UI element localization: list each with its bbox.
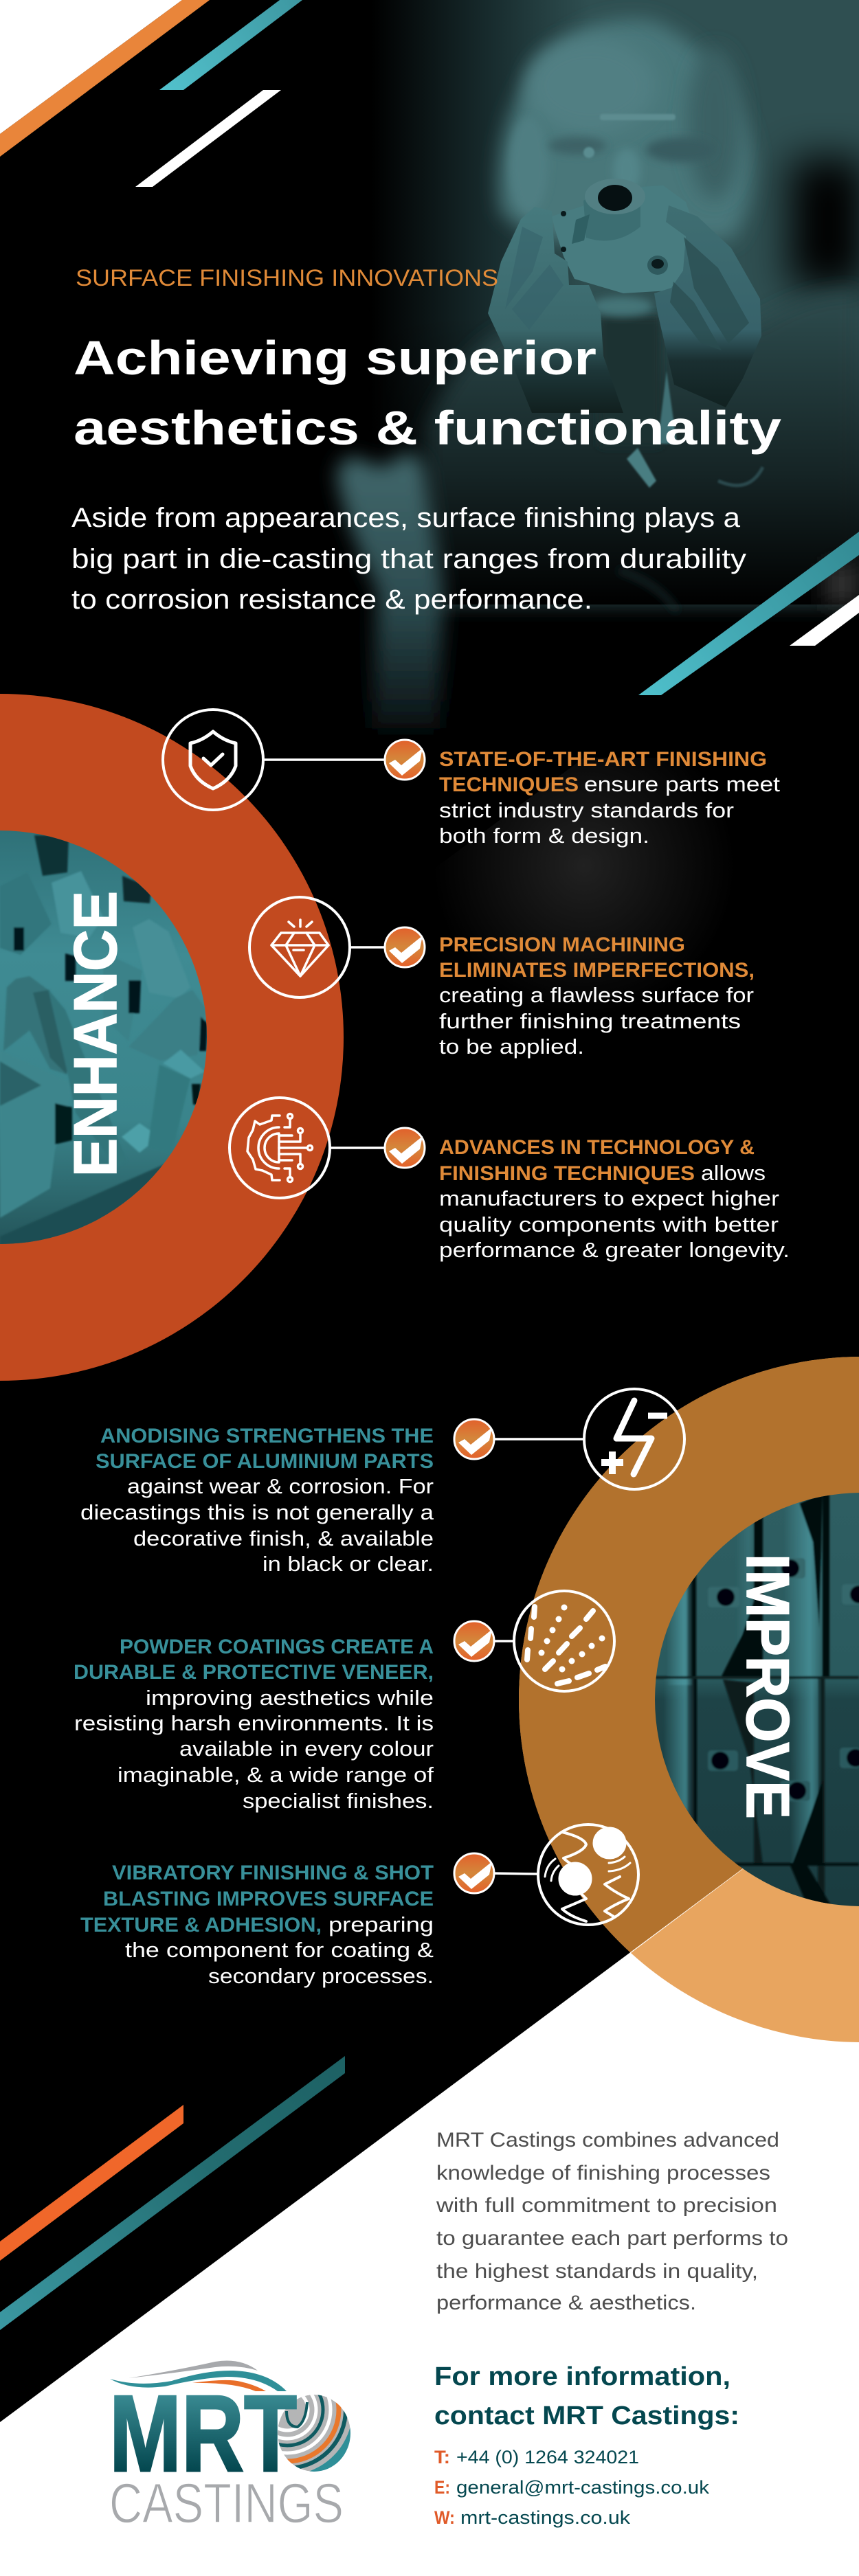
text block: anodising: decorative finish, & available <box>133 1526 434 1550</box>
text block: anodising: SURFACE OF ALUMINIUM PARTS <box>96 1450 434 1473</box>
text block: anodising: ANODISING STRENGTHENS THE <box>100 1425 434 1447</box>
body <box>426 292 859 605</box>
text block: vibratory finishing <box>80 1862 434 1988</box>
text block: vibratory finishing: secondary processes. <box>208 1964 434 1988</box>
text block: anodising: diecastings this is not generally a <box>80 1500 434 1524</box>
text block: powder coatings: resisting harsh environments. It is <box>74 1711 434 1735</box>
text block: powder coatings: POWDER COATINGS CREATE A <box>120 1636 434 1658</box>
IMPROVE label: IMPROVE <box>734 1554 802 1819</box>
text block: advances in technology: FINISHING TECHNIQUES <box>439 1162 695 1185</box>
teal stripe <box>159 0 302 90</box>
text block: powder coatings: available in every colour <box>179 1737 434 1761</box>
text block: anodising: in black or clear. <box>263 1552 434 1576</box>
ENHANCE label: ENHANCE <box>61 891 129 1177</box>
text block: precision machining: ELIMINATES IMPERFECTIONS, <box>439 959 755 982</box>
icon: anodising bolt <box>584 1389 684 1489</box>
text block: state of the art: ensure parts meet <box>584 772 780 796</box>
text block: precision machining <box>439 934 755 1059</box>
closing paragraph <box>436 2129 788 2314</box>
contact details: general@mrt-castings.co.uk <box>456 2477 710 2498</box>
enhance photo <box>0 824 213 1250</box>
panel: improve ring <box>519 1357 859 1952</box>
text block: vibratory finishing: BLASTING IMPROVES SURFACE <box>103 1888 434 1910</box>
intro paragraph: to corrosion resistance & performance. <box>71 585 592 615</box>
text block: state of the art: both form & design. <box>439 824 649 848</box>
title <box>74 331 781 455</box>
text block: advances in technology: performance & greater longevity. <box>439 1238 790 1262</box>
text block: advances in technology: ADVANCES IN TECHNOLOGY & <box>439 1136 755 1159</box>
text block: powder coatings: specialist finishes. <box>243 1789 434 1813</box>
contact details: W: <box>434 2507 455 2528</box>
text block: state of the art: TECHNIQUES <box>439 773 579 796</box>
text block: powder coatings <box>74 1636 434 1813</box>
check badge 4 <box>454 1419 494 1459</box>
text block: precision machining: creating a flawless surface for <box>439 983 754 1007</box>
contact heading <box>434 2362 739 2430</box>
photo: technician inspecting a casting <box>337 0 859 728</box>
right stripes <box>638 532 859 695</box>
logo wordmark CASTINGS: CASTINGS <box>109 2472 344 2535</box>
orange stripe <box>0 2105 183 2261</box>
top corner shapes <box>0 0 302 187</box>
intro paragraph <box>71 503 746 615</box>
contact details: T: <box>434 2447 450 2467</box>
closing paragraph: knowledge of finishing processes <box>436 2162 770 2184</box>
text block: advances in technology: manufacturers to expect higher <box>439 1186 779 1210</box>
intro paragraph: Aside from appearances, surface finishing plays a <box>71 503 741 533</box>
contact heading: contact MRT Castings: <box>434 2402 739 2430</box>
orange stripe <box>0 0 210 157</box>
intro paragraph: big part in die-casting that ranges from durability <box>71 544 746 574</box>
white footer wedge <box>0 1782 859 2576</box>
improve photo <box>653 1487 859 1913</box>
text block: vibratory finishing: TEXTURE & ADHESION, <box>80 1914 322 1936</box>
icon: gear with circuit <box>230 1098 330 1198</box>
text block: powder coatings: improving aesthetics while <box>146 1686 434 1710</box>
logo wordmark MRT: MRT <box>109 2373 297 2494</box>
neck shadow <box>599 316 661 447</box>
closing paragraph: performance & aesthetics. <box>436 2292 696 2314</box>
text block: advances in technology <box>439 1136 790 1262</box>
text block: powder coatings: DURABLE & PROTECTIVE VENEER, <box>74 1661 434 1684</box>
gloves <box>488 207 623 413</box>
text block: state of the art <box>439 748 780 848</box>
check badge 6 <box>454 1853 494 1893</box>
text block: vibratory finishing: preparing <box>328 1912 434 1936</box>
text block: advances in technology: quality components with better <box>439 1212 779 1236</box>
text block: powder coatings: imaginable, & a wide range of <box>118 1763 434 1787</box>
improve ring over wedge <box>631 1782 859 2042</box>
logo: MRT Castings <box>110 2360 350 2522</box>
text block: vibratory finishing: VIBRATORY FINISHING & SHOT <box>112 1862 434 1884</box>
decorative grey glow <box>470 758 698 980</box>
connector lines: enhance <box>264 760 385 1148</box>
contact details: E: <box>434 2477 450 2498</box>
icon: vibratory finishing <box>538 1824 638 1925</box>
casting part <box>552 181 698 293</box>
logo swooshes <box>110 2361 287 2391</box>
lower slivers <box>658 371 677 444</box>
text block: precision machining: PRECISION MACHINING <box>439 934 685 956</box>
teal stripe <box>0 2056 345 2330</box>
white stripe <box>135 90 281 187</box>
text block: state of the art: strict industry standards for <box>439 798 734 822</box>
check badge 3 <box>385 1128 425 1168</box>
icon: diamond <box>249 897 350 997</box>
text block: precision machining: to be applied. <box>439 1035 584 1059</box>
closing paragraph: to guarantee each part performs to <box>436 2227 788 2250</box>
text block: vibratory finishing: the component for coating & <box>125 1938 434 1962</box>
contact details: mrt-castings.co.uk <box>460 2507 631 2528</box>
contact details <box>434 2447 710 2528</box>
contact details: +44 (0) 1264 324021 <box>456 2447 639 2467</box>
text block: advances in technology: allows <box>701 1161 766 1185</box>
icon: powder coating <box>514 1591 614 1691</box>
blurred hand <box>337 455 443 728</box>
logo globe <box>278 2395 350 2472</box>
closing paragraph: MRT Castings combines advanced <box>436 2129 779 2151</box>
text block: precision machining: further finishing treatments <box>439 1009 741 1033</box>
closing paragraph: the highest standards in quality, <box>436 2260 758 2283</box>
icon: shield <box>163 710 263 810</box>
text block: state of the art: STATE-OF-THE-ART FINISHING <box>439 748 767 771</box>
head and hair <box>499 19 753 240</box>
title: Achieving superior <box>74 331 596 385</box>
text block: anodising <box>80 1425 434 1576</box>
panel: enhance ring <box>0 694 344 1381</box>
title: aesthetics & functionality <box>74 401 781 455</box>
eyebrow: SURFACE FINISHING INNOVATIONS <box>76 265 498 291</box>
check badge 5 <box>454 1621 494 1661</box>
connector lines: improve <box>491 1439 584 1874</box>
text block: anodising: against wear & corrosion. For <box>127 1474 434 1498</box>
bottom stripes <box>0 2056 345 2330</box>
closing paragraph: with full commitment to precision <box>436 2194 777 2217</box>
check badge 1 <box>385 740 425 780</box>
contact heading: For more information, <box>434 2362 730 2391</box>
white corner <box>0 0 182 134</box>
check badge 2 <box>385 927 425 967</box>
